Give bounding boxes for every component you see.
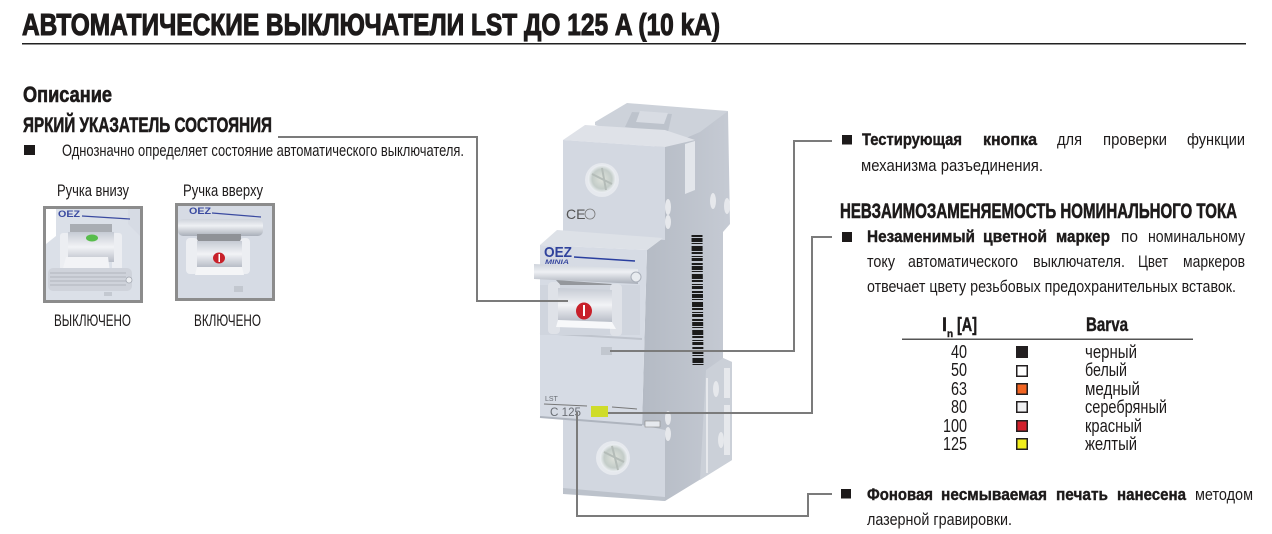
text block: color marker: Цвет [1138, 252, 1168, 271]
mark: CE: CE [566, 206, 585, 222]
lower block [563, 418, 665, 501]
row: 63 A copper [951, 378, 1140, 399]
text block: laser print: печать [1056, 485, 1108, 504]
color marker [591, 406, 608, 417]
row: 63 A copper: 63 [951, 378, 967, 399]
connector: laser print [577, 412, 832, 516]
row: 100 A red: красный [1085, 415, 1142, 436]
row: 80 A silver: серебряный [1085, 396, 1167, 417]
text block: test button: функции [1187, 130, 1245, 149]
icon: breaker handle up: OEZ [189, 206, 212, 216]
text block: laser print [841, 485, 1253, 529]
text block: test button: для [1057, 130, 1082, 149]
top face of upper block [563, 125, 695, 147]
rating label: C 125 [550, 407, 581, 419]
text block: laser print: нанесена [1117, 485, 1186, 504]
screw: lower [596, 441, 630, 475]
text block: test button: проверки [1103, 130, 1167, 149]
screw: upper [585, 163, 619, 197]
mid block top face [540, 230, 663, 250]
text block: color marker: номинальному [1148, 227, 1245, 246]
text block: color marker: маркеров [1183, 252, 1245, 271]
row: 40 A black: черный [1085, 341, 1137, 362]
heading: bright status indicator: ЯРКИЙ УКАЗАТЕЛЬ СОСТОЯНИЯ [23, 113, 272, 137]
row: 40 A black: 40 [951, 341, 967, 362]
row: 50 A white: белый [1085, 359, 1127, 380]
text block: laser print: методом [1195, 485, 1253, 504]
text block: test button: кнопка [983, 130, 1037, 149]
table header [902, 315, 1193, 340]
row: 50 A white: 50 [951, 359, 967, 380]
text block: laser print: Фоновая [867, 485, 933, 504]
text block: color marker: току [867, 252, 895, 271]
side face [642, 111, 732, 501]
text block: color marker: цветной [983, 227, 1047, 246]
text block: test button [842, 130, 1245, 175]
text block: color marker: по [1121, 227, 1138, 246]
row: 80 A silver: 80 [951, 396, 967, 417]
switch handle [534, 264, 641, 336]
panel: handle down, off: ВЫКЛЮЧЕНО [54, 311, 131, 330]
row: 100 A red: 100 [943, 415, 967, 436]
table header: [A] [957, 315, 977, 336]
text block: color marker: Незаменимый [867, 227, 975, 246]
test button [601, 347, 612, 355]
panel: handle down, off [44, 181, 142, 330]
illustration: circuit breaker [534, 103, 732, 501]
row: 80 A silver [951, 396, 1167, 417]
side ports [665, 193, 730, 473]
table: rated current and color [902, 315, 1193, 454]
icon: breaker handle down: OEZ [58, 209, 81, 219]
connector: test button [610, 141, 832, 351]
text block: laser print: лазерной гравировки. [867, 510, 1012, 529]
logo: OEZ Minia: OEZ [544, 244, 572, 261]
connector: color marker [608, 237, 832, 413]
row: 63 A copper: медный [1085, 378, 1140, 399]
text block: color marker: автоматического [908, 252, 1018, 271]
table header: Barva [1086, 315, 1128, 336]
table header: I [942, 315, 947, 336]
text block: color marker: выключателя. [1033, 252, 1125, 271]
row: 125 A yellow: желтый [1085, 433, 1137, 454]
text block: laser print: несмываемая [941, 485, 1047, 504]
panel: handle up, on [176, 181, 274, 330]
row: 100 A red [943, 415, 1142, 436]
row: 50 A white [951, 359, 1127, 380]
mid block front face [540, 245, 647, 425]
title: АВТОМАТИЧЕСКИЕ ВЫКЛЮЧАТЕЛИ LST ДО 125 A (10 kA) [22, 7, 720, 42]
rating label: LST [545, 396, 559, 403]
panel: handle up, on: ВКЛЮЧЕНО [194, 311, 261, 330]
upper front face [563, 140, 665, 240]
text block: status indicator description: Однозначно определяет состояние автоматического выключателя. [62, 141, 464, 160]
panel: handle up, on: Ручка вверху [183, 181, 263, 200]
barcode [697, 235, 698, 365]
rating label [544, 396, 660, 427]
mark: CE [566, 206, 595, 222]
icon: breaker handle down [44, 208, 142, 302]
row: 125 A yellow: 125 [943, 433, 967, 454]
text block: test button: Тестирующая [862, 130, 962, 149]
row: 125 A yellow [943, 433, 1137, 454]
icon: breaker handle up [176, 204, 274, 300]
table header: n [947, 329, 953, 340]
logo: OEZ Minia: MINIA [545, 259, 569, 266]
text block: test button: механизма разъединения. [861, 156, 1043, 175]
heading: description: Описание [23, 82, 112, 107]
connector: status indicator [278, 137, 568, 301]
panel: handle down, off: Ручка внизу [57, 181, 129, 200]
logo: OEZ Minia [544, 244, 635, 266]
text block: color marker [842, 227, 1245, 296]
text block: color marker: маркер [1056, 227, 1110, 246]
row: 40 A black [951, 341, 1137, 362]
back top section [595, 103, 728, 150]
